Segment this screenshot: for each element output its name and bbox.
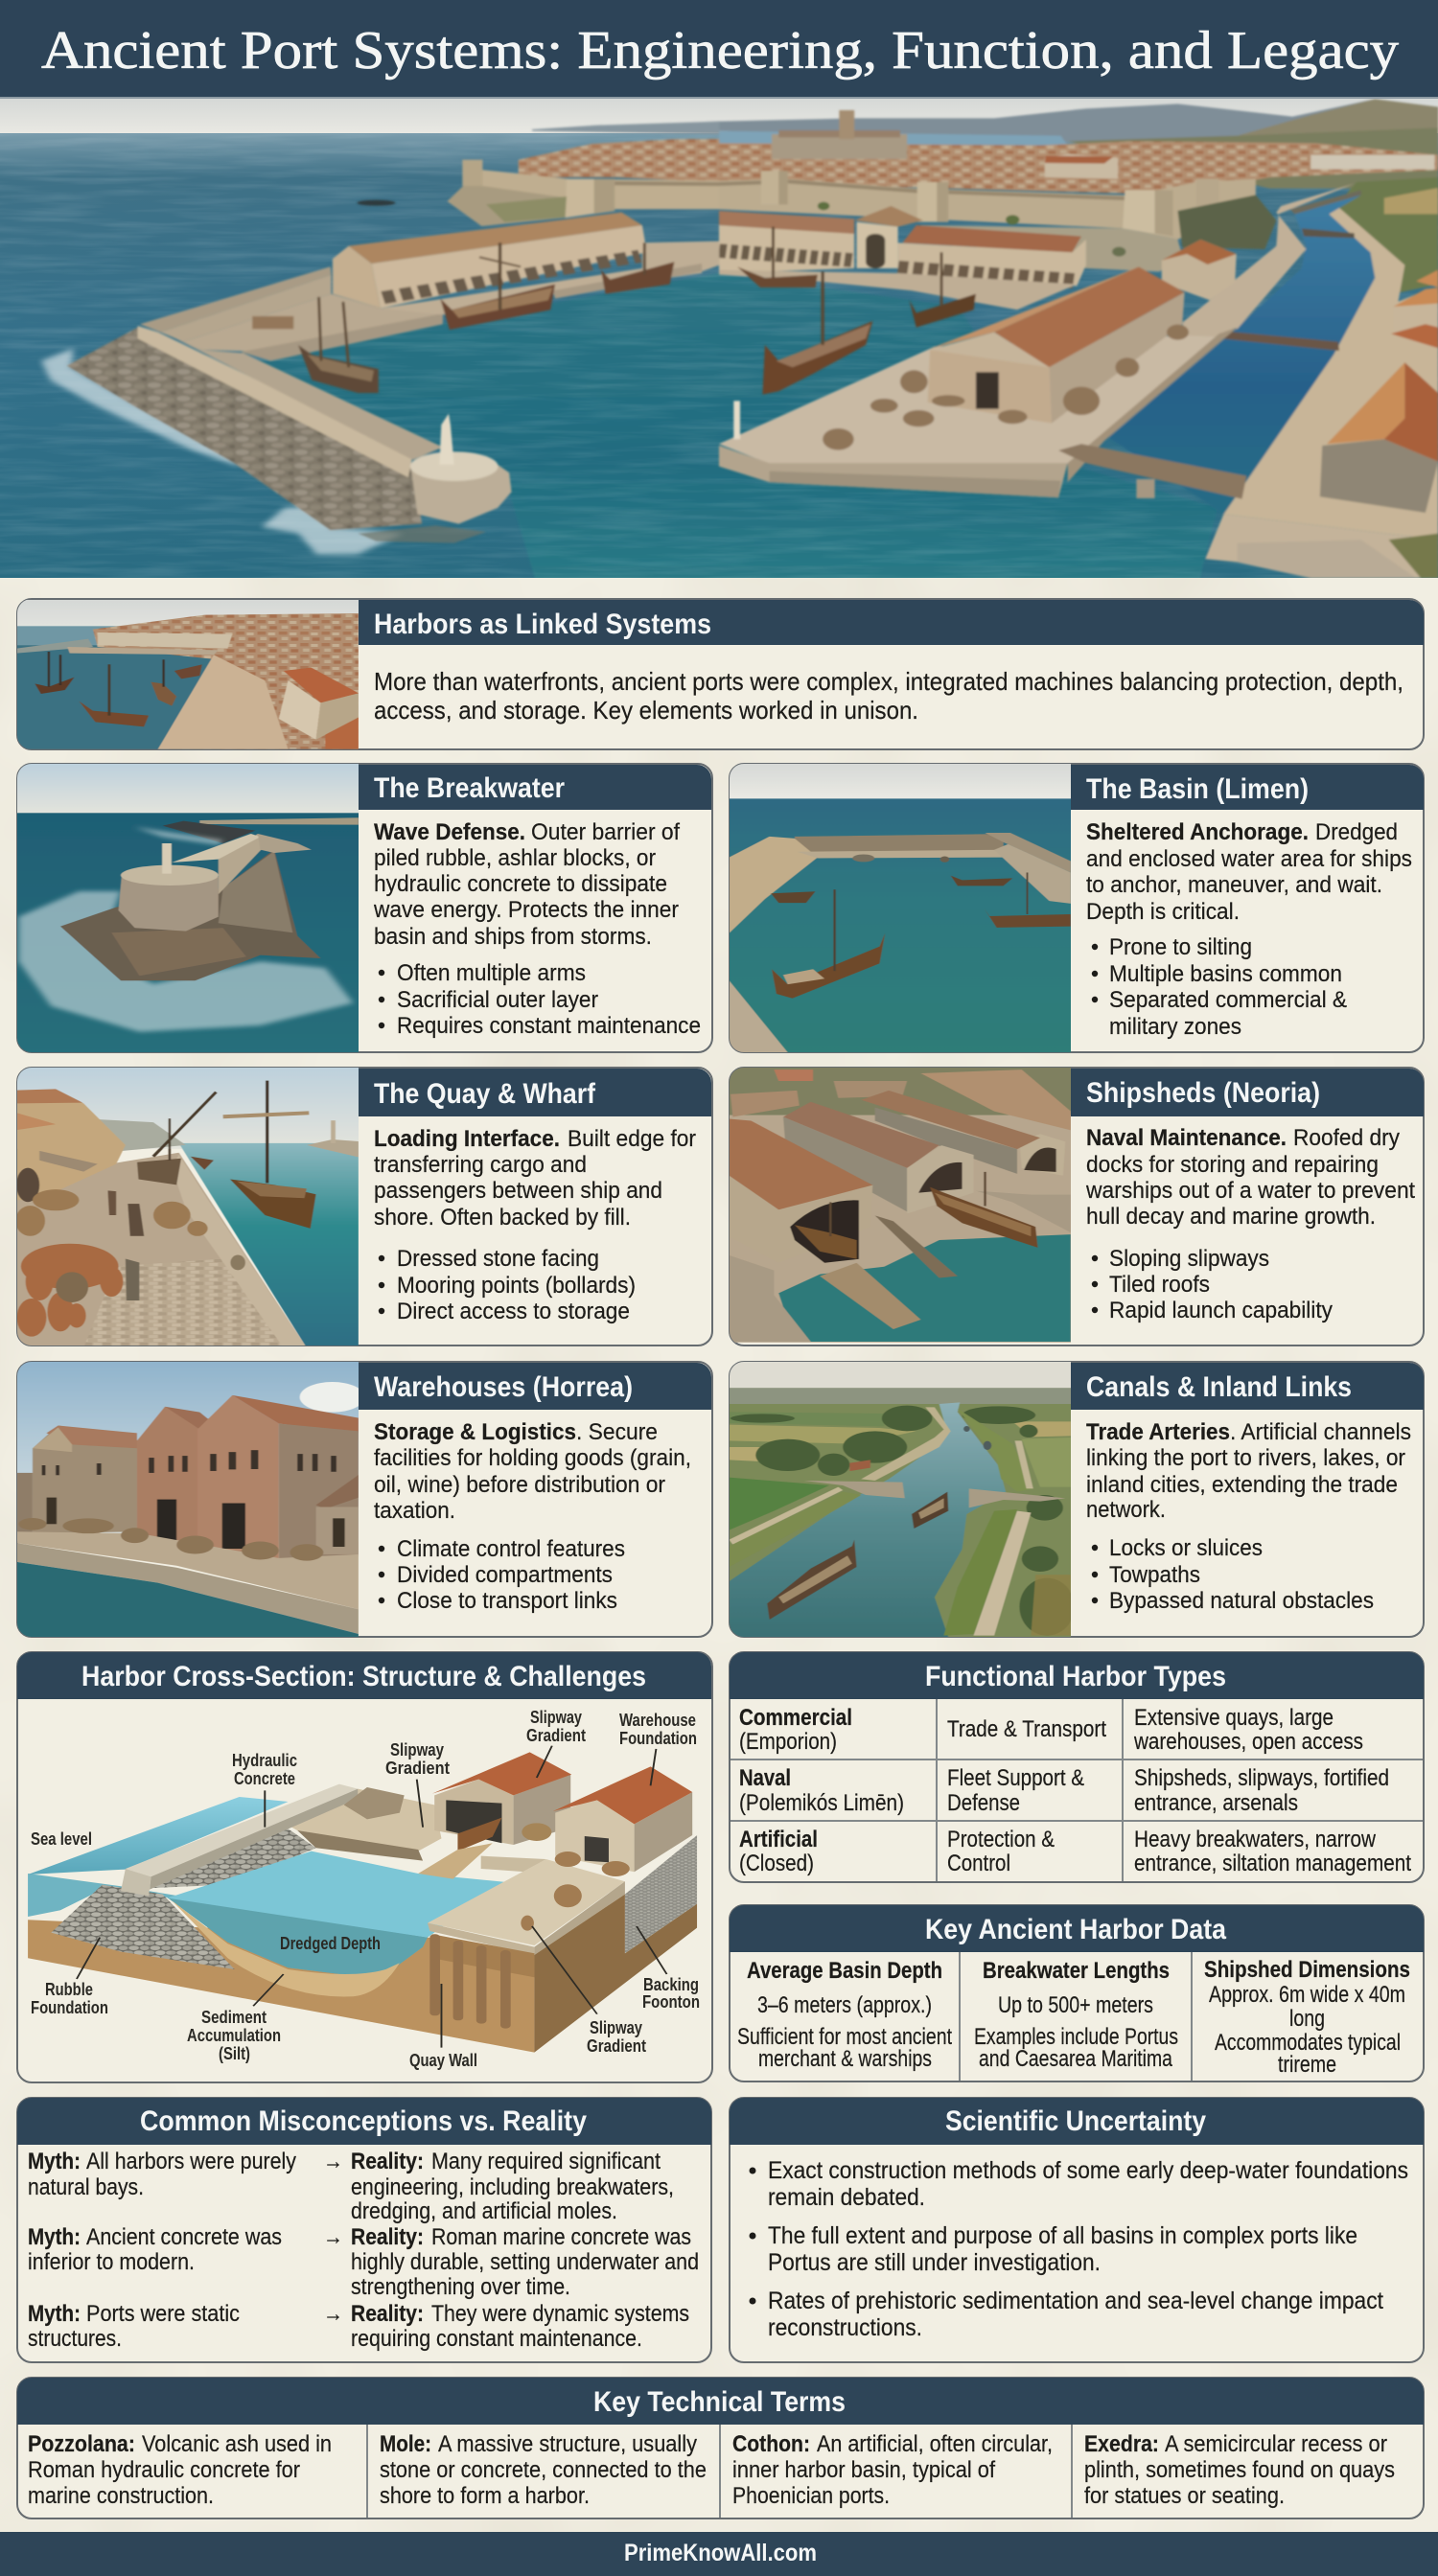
title banner: Ancient Port Systems: Engineering, Function, and Legacy [41, 21, 1399, 80]
diagram labels: Accumulation [187, 2026, 281, 2045]
text: naval maintenance: Roofed dry [1293, 1125, 1400, 1151]
panel: scientific uncertainty [730, 2098, 1424, 2362]
text: sheltered anchorage: Sheltered Anchorage. [1086, 819, 1309, 845]
row: naval: Fleet Support & [947, 1765, 1084, 1791]
myth and reality 2: Roman marine concrete was [431, 2224, 691, 2250]
heading: key technical terms: Key Technical Terms [593, 2386, 846, 2418]
image: shipsheds [729, 1066, 1072, 1343]
text: sheltered anchorage: and enclosed water area for ships [1086, 846, 1412, 872]
bullet list: canals: Locks or sluices [1109, 1535, 1263, 1561]
text: wave defense: basin and ships from storms. [374, 924, 652, 950]
text: loading interface [374, 1126, 696, 1230]
diagram labels [31, 1708, 700, 2070]
panel: harbors as linked systems [16, 599, 1424, 749]
heading: key data: Key Ancient Harbor Data [925, 1914, 1226, 1945]
myth and reality 1: Myth: [28, 2149, 81, 2174]
diagram labels: Warehouse [619, 1711, 696, 1730]
text: loading interface: transferring cargo and [374, 1152, 587, 1178]
text: storage and logistics: oil, wine) before distribution or [374, 1472, 665, 1498]
row: artificial [739, 1827, 1411, 1876]
bullet list: uncertainties: reconstructions. [768, 2314, 922, 2341]
bullet list: basin: military zones [1109, 1014, 1241, 1040]
heading: canals: Canals & Inland Links [1086, 1371, 1352, 1403]
row: naval: entrance, arsenals [1134, 1790, 1298, 1816]
hero: far bank and road [1329, 177, 1438, 294]
row: commercial: Trade & Transport [947, 1716, 1106, 1742]
term: cothon: inner harbor basin, typical of [732, 2457, 995, 2483]
stat: shipshed dimensions [1204, 1957, 1410, 2078]
heading: the basin: The Basin (Limen) [1086, 773, 1309, 805]
term: exedra: A semicircular recess or [1165, 2431, 1387, 2457]
panel: key ancient harbor data [730, 1905, 1424, 2082]
diagram labels: Hydraulic [232, 1751, 297, 1770]
stat: breakwater lengths: Examples include Portus [974, 2024, 1178, 2050]
row: commercial: warehouses, open access [1133, 1729, 1363, 1755]
term: exedra: Exedra: [1084, 2431, 1159, 2457]
bullet list: warehouses [379, 1536, 625, 1614]
text: storage and logistics: facilities for holding goods (grain, [374, 1445, 691, 1471]
bullet list: uncertainties: The full extent and purpose of all basins in complex ports like [768, 2222, 1357, 2249]
diagram labels: Slipway [590, 2018, 642, 2037]
text: sheltered anchorage: to anchor, maneuver, and wait. [1086, 872, 1382, 898]
term: pozzolana: Volcanic ash used in [142, 2431, 332, 2457]
hero image: aerial view of ancient port [0, 99, 1438, 585]
row: artificial: Protection & [947, 1827, 1055, 1852]
diagram: harbor cross-section block [28, 1746, 697, 2053]
text: storage and logistics: Storage & Logistics [374, 1419, 576, 1445]
bullet list: quay [379, 1246, 636, 1324]
footer bar: PrimeKnowAll.com [624, 2540, 817, 2566]
text: trade arteries: linking the port to rivers, lakes, or [1086, 1445, 1405, 1471]
text: sheltered anchorage: Dredged [1315, 819, 1398, 845]
text: loading interface: Loading Interface. [374, 1126, 560, 1152]
text: sheltered anchorage [1086, 819, 1412, 925]
stat: average basin depth: Average Basin Depth [747, 1958, 942, 1984]
stat: breakwater lengths: Up to 500+ meters [998, 1992, 1153, 2018]
text: storage and logistics: taxation. [374, 1498, 455, 1524]
image: quay [14, 1066, 362, 1347]
row: artificial: Artificial [739, 1827, 818, 1852]
bullet list: warehouses: Climate control features [397, 1536, 625, 1562]
bullet list: shipsheds [1092, 1246, 1333, 1323]
text: naval maintenance: Naval Maintenance. [1086, 1125, 1287, 1151]
bullet list: canals [1092, 1535, 1374, 1614]
diagram labels: Sea level [31, 1829, 92, 1849]
term: mole: A massive structure, usually [438, 2431, 697, 2457]
myth and reality 3: requiring constant maintenance. [351, 2326, 642, 2352]
panel: the quay and wharf [14, 1066, 712, 1347]
text: loading interface: Built edge for [568, 1126, 696, 1152]
row: naval: Shipsheds, slipways, fortified [1134, 1765, 1389, 1791]
panel: shipsheds [729, 1066, 1424, 1346]
bullet list: basin [1092, 934, 1347, 1040]
myth and reality 1: natural bays. [28, 2174, 144, 2200]
hero: right bridges and houses [1058, 444, 1246, 499]
stat: average basin depth [737, 1958, 952, 2072]
term: exedra: for statues or seating. [1084, 2483, 1285, 2509]
diagram labels: Gradient [587, 2036, 646, 2056]
text: trade arteries [1086, 1419, 1411, 1523]
stat: shipshed dimensions: long [1289, 2006, 1325, 2032]
bullet list: warehouses: Close to transport links [397, 1588, 617, 1614]
myth and reality 3: Ports were static [86, 2301, 240, 2327]
text: wave defense: Outer barrier of [531, 819, 680, 845]
bullet list: uncertainties: Portus are still under investigation. [768, 2249, 1101, 2276]
stat: breakwater lengths: Breakwater Lengths [983, 1958, 1170, 1984]
myth and reality 3 [28, 2301, 689, 2352]
bullet list: warehouses: Divided compartments [397, 1562, 613, 1588]
myth and reality 3: → [323, 2301, 343, 2327]
text: wave defense: piled rubble, ashlar blocks, or [374, 845, 656, 871]
hero: central stoa [719, 211, 854, 235]
myth and reality 3: structures. [28, 2326, 122, 2352]
diagram labels: (Silt) [219, 2044, 250, 2063]
diagram labels: Foonton [642, 1992, 700, 2012]
term: pozzolana: Roman hydraulic concrete for [28, 2457, 300, 2483]
row: naval: (Polemikós Limēn) [739, 1790, 904, 1816]
term: mole: shore to form a harbor. [380, 2483, 590, 2509]
stat: average basin depth: Sufficient for most ancient [737, 2024, 952, 2050]
hero: lighthouse mole head [410, 465, 512, 524]
term: cothon: An artificial, often circular, [817, 2431, 1053, 2457]
text: trade arteries: network. [1086, 1497, 1166, 1523]
diagram labels: Slipway [530, 1708, 582, 1727]
heading: misconceptions: Common Misconceptions vs. Reality [140, 2105, 587, 2137]
panel: functional harbor types table [730, 1652, 1424, 1882]
term: pozzolana: Pozzolana: [28, 2431, 135, 2457]
stat: shipshed dimensions: Accommodates typical [1215, 2030, 1401, 2056]
row: naval: Naval [739, 1765, 791, 1791]
text: trade arteries: . Artificial channels [1230, 1419, 1411, 1445]
bullet list: shipsheds: Sloping slipways [1109, 1246, 1269, 1272]
row: commercial: (Emporion) [739, 1729, 837, 1755]
text: wave defense: hydraulic concrete to dissipate [374, 871, 667, 897]
bullet list: breakwater: Often multiple arms [397, 960, 586, 986]
text: loading interface: passengers between ship and [374, 1178, 662, 1204]
text: storage and logistics: . Secure [576, 1419, 658, 1445]
panel: the basin [729, 763, 1424, 1052]
title banner [0, 0, 1438, 99]
row: commercial: Extensive quays, large [1134, 1705, 1334, 1731]
myth and reality 1: → [323, 2149, 343, 2174]
panel: harbor cross-section [17, 1652, 712, 2082]
hero: ships at left [440, 285, 555, 330]
row: naval [739, 1765, 1389, 1816]
bullet list: breakwater [379, 960, 701, 1039]
term: exedra: plinth, sometimes found on quays [1084, 2457, 1395, 2483]
hero: central pier with warehouse [719, 334, 1221, 464]
bullet list: basin: Multiple basins common [1109, 961, 1342, 987]
text: storage and logistics [374, 1419, 691, 1524]
diagram labels: Rubble [45, 1980, 93, 1999]
row: naval: Defense [947, 1790, 1020, 1816]
term: cothon: Phoenician ports. [732, 2483, 890, 2509]
panel: the breakwater [14, 764, 712, 1056]
heading: functional harbor types: Functional Harbor Types [925, 1661, 1226, 1692]
diagram labels: Concrete [234, 1769, 295, 1788]
hero: left half scene [41, 122, 719, 554]
term: cothon: Cothon: [732, 2431, 810, 2457]
term: cothon [732, 2431, 1053, 2509]
text: trade arteries: Trade Arteries [1086, 1419, 1230, 1445]
myth and reality 2: strengthening over time. [351, 2274, 570, 2300]
image: canal [729, 1361, 1075, 1639]
text: naval maintenance: docks for storing and repairing [1086, 1152, 1379, 1178]
myth and reality 3: Myth: [28, 2301, 81, 2327]
myth and reality 2: inferior to modern. [28, 2249, 195, 2275]
myth and reality 2: Ancient concrete was [86, 2224, 282, 2250]
text: loading interface: shore. Often backed by fill. [374, 1205, 631, 1230]
bullet list: canals: Bypassed natural obstacles [1109, 1588, 1374, 1614]
text: wave defense [373, 819, 680, 950]
myth and reality 3: Reality: [351, 2301, 424, 2327]
myth and reality 2: Reality: [351, 2224, 424, 2250]
myth and reality 2: highly durable, setting underwater and [351, 2249, 699, 2275]
bullet list: quay: Direct access to storage [397, 1299, 630, 1324]
myth and reality 1: dredging, and artificial moles. [351, 2198, 617, 2224]
term: mole: Mole: [380, 2431, 431, 2457]
intro text: access, and storage. Key elements worked in unison. [374, 696, 918, 724]
bullet list: quay: Dressed stone facing [397, 1246, 599, 1272]
myth and reality 1 [28, 2149, 674, 2224]
stat: breakwater lengths [974, 1958, 1178, 2072]
term: mole: stone or concrete, connected to the [380, 2457, 707, 2483]
panel: key technical terms [17, 2378, 1424, 2518]
diagram labels: Slipway [390, 1740, 444, 1760]
footer bar [0, 2532, 1438, 2576]
text: wave defense: Wave Defense. [374, 819, 525, 845]
intro text [374, 667, 1403, 724]
bullet list: canals: Towpaths [1109, 1562, 1200, 1588]
diagram labels: Backing [643, 1975, 699, 1994]
heading: scientific uncertainty: Scientific Uncertainty [945, 2105, 1206, 2137]
text: naval maintenance: hull decay and marine growth. [1086, 1204, 1376, 1230]
row: artificial: Control [947, 1851, 1010, 1876]
myth and reality 1: Many required significant [431, 2149, 661, 2174]
bullet list: breakwater: Requires constant maintenance [397, 1013, 701, 1039]
row: artificial: Heavy breakwaters, narrow [1134, 1827, 1377, 1852]
heading: cross-section: Harbor Cross-Section: Structure & Challenges [81, 1661, 646, 1692]
stat: breakwater lengths: and Caesarea Maritima [979, 2046, 1173, 2072]
bullet list: basin: Separated commercial & [1109, 987, 1347, 1013]
diagram labels: Foundation [31, 1998, 108, 2017]
myth and reality 2 [28, 2224, 699, 2300]
panel: warehouses [14, 1359, 712, 1640]
bullet list: shipsheds: Tiled roofs [1109, 1272, 1210, 1298]
stat: shipshed dimensions: Shipshed Dimensions [1204, 1957, 1410, 1983]
stat: average basin depth: 3–6 meters (approx.) [757, 1992, 932, 2018]
bullet list: breakwater: Sacrificial outer layer [397, 987, 598, 1013]
hero: right half scene [719, 99, 1438, 578]
term: exedra [1084, 2431, 1395, 2509]
diagram labels: Gradient [526, 1726, 586, 1745]
row: commercial: Commercial [739, 1705, 852, 1731]
heading: shipsheds: Shipsheds (Neoria) [1086, 1077, 1320, 1109]
term: pozzolana [28, 2431, 332, 2509]
panel: canals and inland links [729, 1361, 1424, 1639]
diagram labels: Sediment [201, 2008, 267, 2027]
bullet list: uncertainties: remain debated. [768, 2184, 925, 2211]
hero: ships at right [762, 321, 872, 395]
myth and reality 2: → [323, 2224, 343, 2250]
text: trade arteries: inland cities, extending the trade [1086, 1472, 1398, 1498]
myth and reality 1: engineering, including breakwaters, [351, 2174, 674, 2200]
row: commercial [739, 1705, 1363, 1755]
text: sheltered anchorage: Depth is critical. [1086, 899, 1240, 925]
bullet list: quay: Mooring points (bollards) [397, 1273, 636, 1299]
stat: shipshed dimensions: trireme [1278, 2052, 1336, 2078]
heading: the breakwater: The Breakwater [374, 772, 565, 804]
myth and reality 3: They were dynamic systems [431, 2301, 689, 2327]
text: naval maintenance: warships out of a water to prevent [1085, 1178, 1415, 1204]
stat: average basin depth: merchant & warships [758, 2046, 932, 2072]
panel: common misconceptions vs reality [17, 2098, 711, 2362]
diagram labels: Foundation [619, 1729, 697, 1748]
heading: harbors as linked systems: Harbors as Linked Systems [374, 609, 711, 640]
myth and reality 1: Reality: [351, 2149, 424, 2174]
heading: warehouses: Warehouses (Horrea) [374, 1371, 633, 1403]
myth and reality 1: All harbors were purely [86, 2149, 296, 2174]
image: breakwater [14, 764, 362, 1056]
term: mole [380, 2431, 707, 2509]
diagram labels: Gradient [385, 1759, 450, 1778]
text: naval maintenance [1085, 1125, 1415, 1230]
diagram labels: Dredged Depth [280, 1934, 381, 1953]
myth and reality 2: Myth: [28, 2224, 81, 2250]
term: pozzolana: marine construction. [28, 2483, 214, 2509]
bullet list: uncertainties [750, 2157, 1408, 2341]
image: warehouses [14, 1359, 364, 1640]
heading: the quay and wharf: The Quay & Wharf [374, 1078, 596, 1110]
image: harbor town [16, 600, 360, 749]
diagram labels: Quay Wall [409, 2051, 477, 2070]
bullet list: basin: Prone to silting [1109, 934, 1252, 960]
image: basin [729, 763, 1072, 1052]
bullet list: uncertainties: Rates of prehistoric sedimentation and sea-level change impact [768, 2288, 1383, 2314]
row: artificial: (Closed) [739, 1851, 814, 1876]
bullet list: shipsheds: Rapid launch capability [1109, 1298, 1333, 1323]
text: wave defense: wave energy. Protects the inner [373, 897, 679, 923]
